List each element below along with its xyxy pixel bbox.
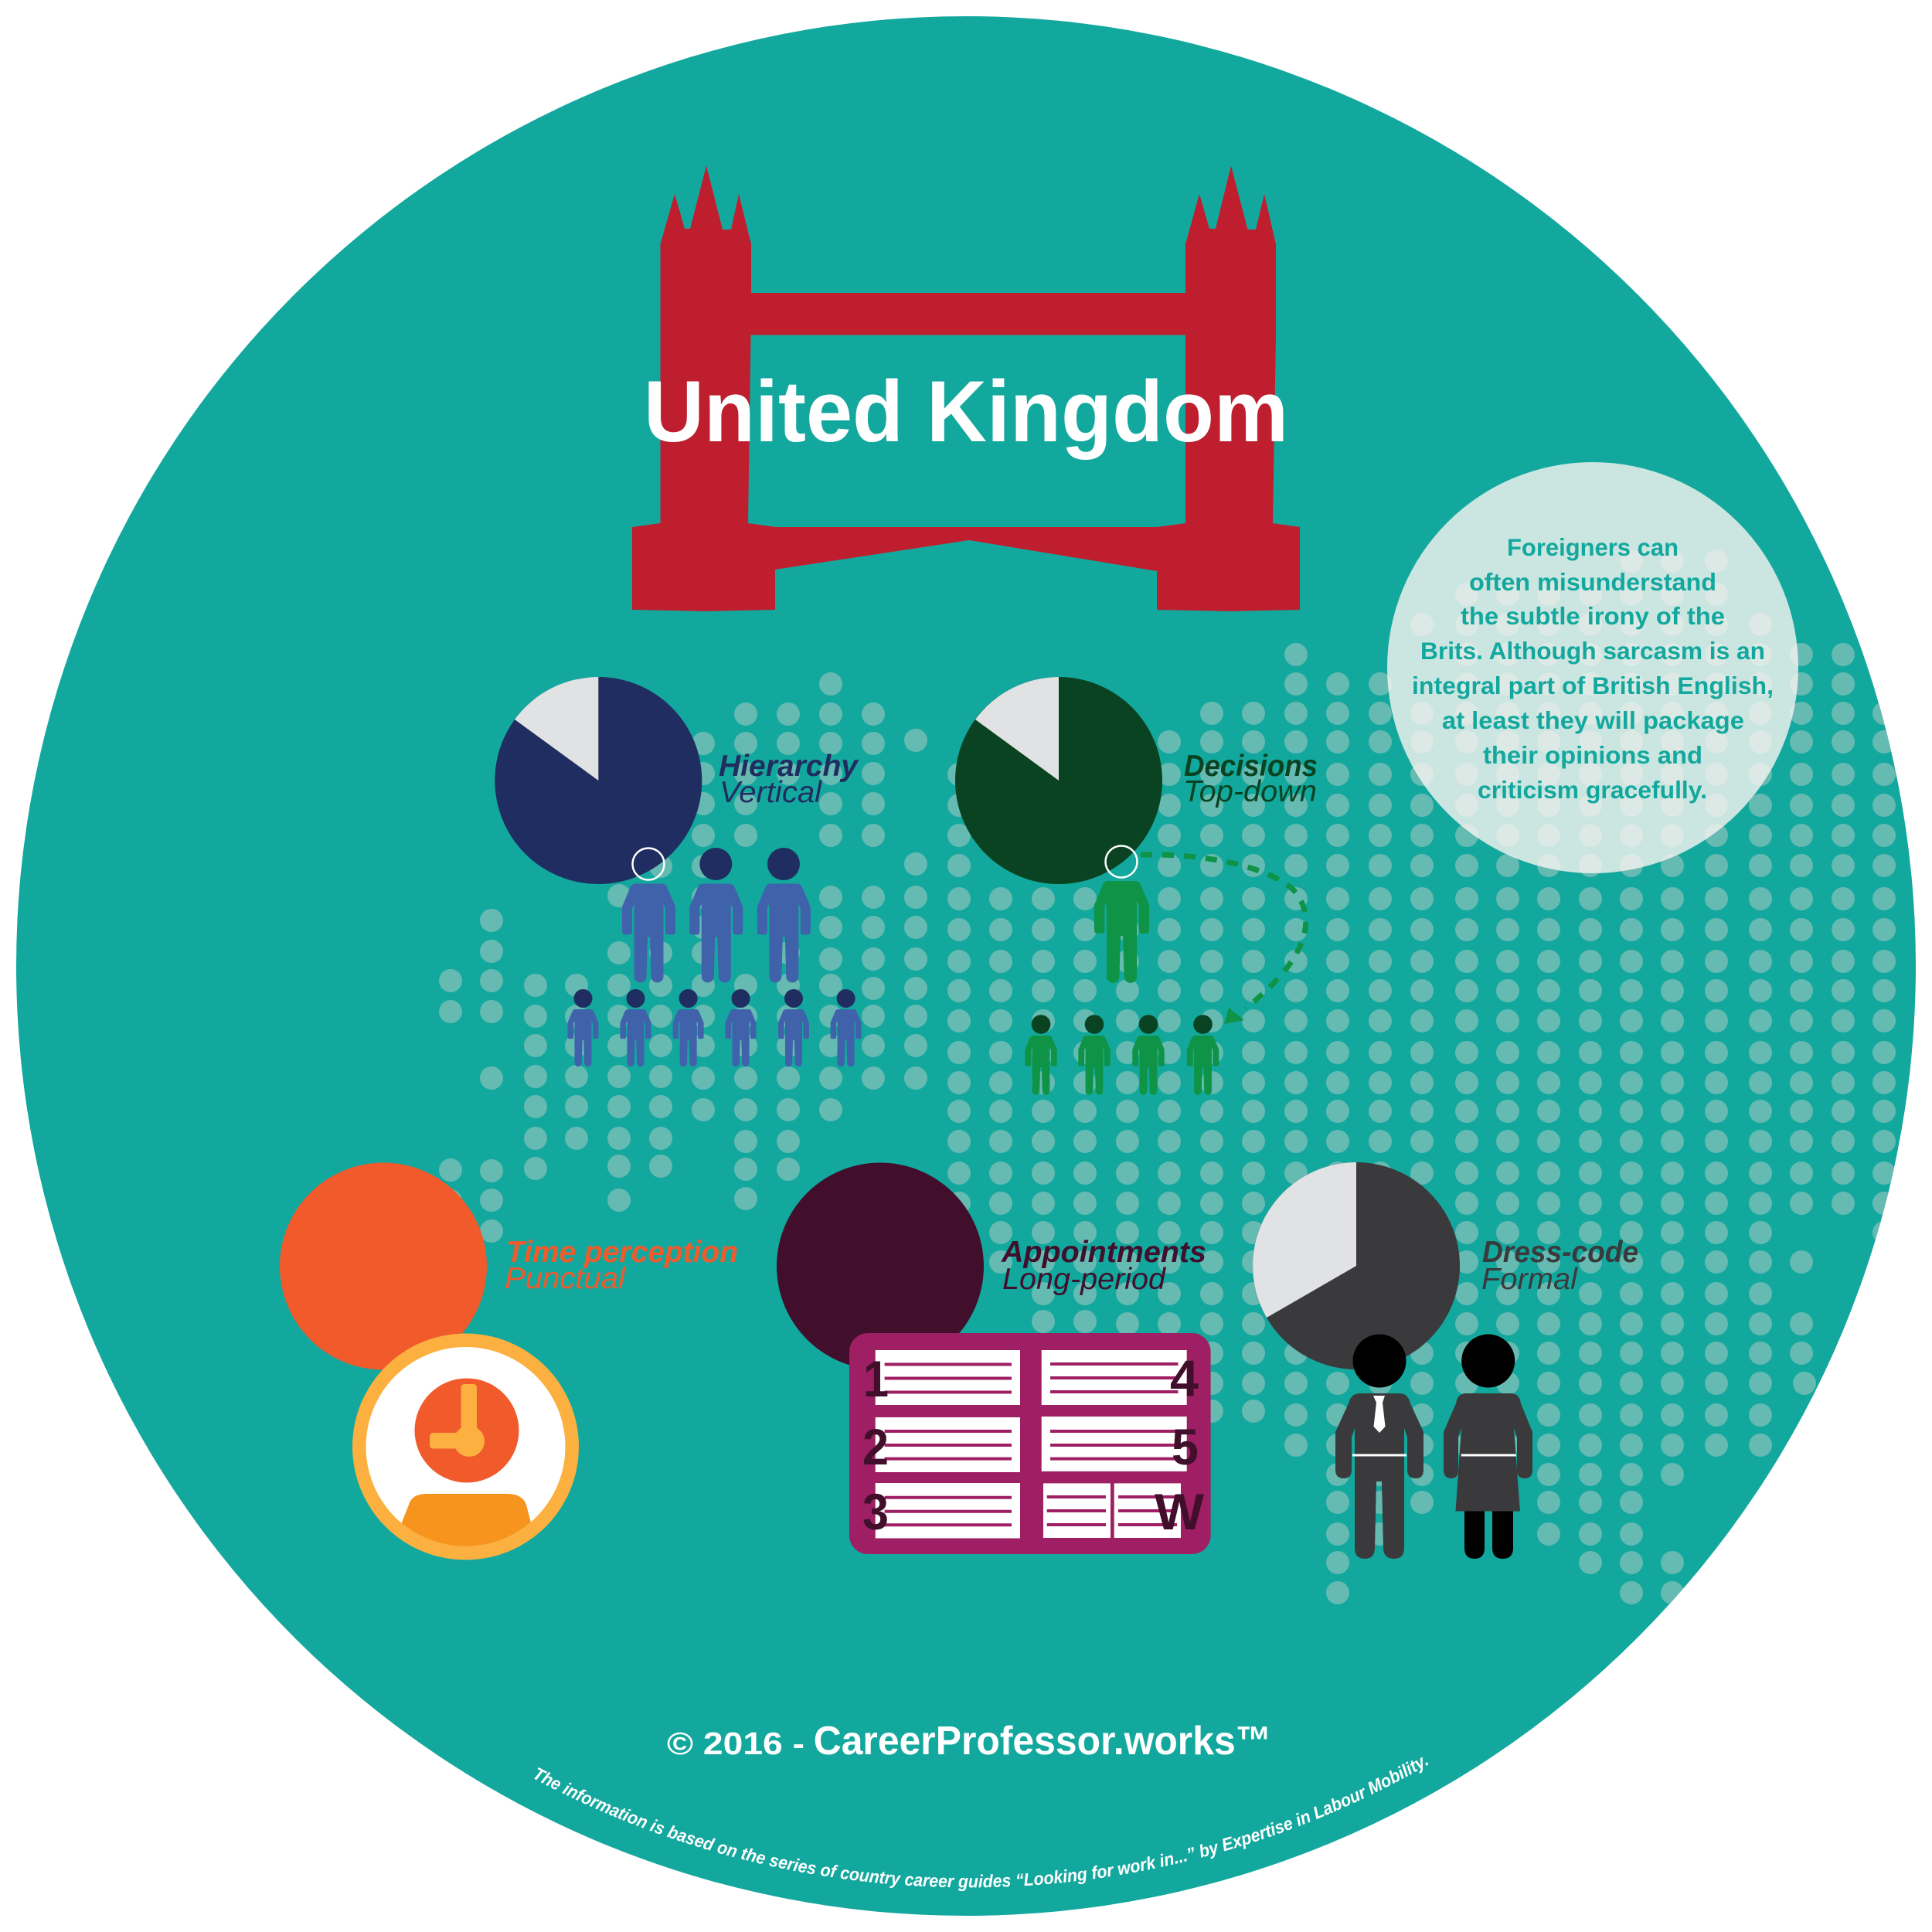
icon: six junior people <box>567 989 862 1066</box>
label: appointments: Long-period <box>1002 1263 1167 1296</box>
icon: three senior people <box>622 848 811 983</box>
callout text: the subtle irony of the <box>1461 602 1725 630</box>
label: appointments: Appointments <box>1001 1236 1206 1269</box>
callout text: their opinions and <box>1483 741 1702 769</box>
callout: irony note <box>1387 462 1798 873</box>
label: dress-code <box>1481 1236 1638 1296</box>
footer: copyright: © 2016 - <box>667 1726 804 1761</box>
arrow: dashed decision path <box>1141 855 1306 1024</box>
label: decisions: Decisions <box>1184 750 1318 783</box>
icon: calendar: 5 <box>1172 1418 1199 1475</box>
label: decisions <box>1183 750 1318 808</box>
pie chart: dress-code <box>1253 1162 1460 1369</box>
panel: appointments <box>777 1162 1211 1554</box>
pie chart: hierarchy <box>495 677 702 884</box>
icon: calendar: 4 <box>1170 1349 1199 1406</box>
label: dress-code: Formal <box>1481 1263 1578 1296</box>
icon: calendar <box>849 1333 1211 1554</box>
callout text: often misunderstand <box>1469 568 1716 596</box>
footer: copyright: CareerProfessor.works <box>814 1719 1236 1764</box>
icon: clock and person <box>352 1334 579 1577</box>
label: time perception: Punctual <box>505 1262 627 1295</box>
icon: leader <box>1094 845 1149 983</box>
pie chart: time perception <box>280 1162 487 1369</box>
callout text: Foreigners can <box>1507 533 1679 561</box>
label: hierarchy <box>719 750 860 809</box>
panel: dress-code <box>1253 1162 1638 1559</box>
callout bubble <box>1387 462 1798 873</box>
label: hierarchy: Hierarchy <box>719 750 860 783</box>
label: appointments <box>1001 1236 1206 1296</box>
icon: calendar: 2 <box>862 1418 889 1475</box>
label: time perception: Time perception <box>506 1236 738 1269</box>
callout text: criticism gracefully. <box>1478 776 1707 804</box>
icon: man in suit <box>1335 1334 1423 1559</box>
dotted world map <box>451 561 1884 1593</box>
panel: decisions <box>955 677 1318 1095</box>
label: time perception <box>505 1236 738 1295</box>
callout text: at least they will package <box>1442 706 1744 734</box>
label: dress-code: Dress-code <box>1482 1236 1638 1269</box>
panel: hierarchy <box>495 677 862 1066</box>
title: United Kingdom <box>644 363 1288 460</box>
callout text: integral part of British English, <box>1412 672 1774 699</box>
icon: four team members <box>1025 1015 1219 1095</box>
pie chart: decisions <box>955 677 1162 884</box>
pie chart: appointments <box>777 1162 984 1369</box>
label: hierarchy: Vertical <box>719 776 822 809</box>
icon: calendar: W <box>1155 1483 1205 1540</box>
footer: curved source note: The information is based on the series of country career guides “Looking for work in...” by Expertise in Labour Mobility. <box>535 1757 1428 1891</box>
callout text <box>1412 533 1774 804</box>
icon: calendar: 1 <box>863 1350 889 1407</box>
callout text: Brits. Although sarcasm is an <box>1420 637 1765 665</box>
panel: time perception <box>280 1162 738 1577</box>
icon: calendar: 3 <box>862 1483 889 1540</box>
label: decisions: Top-down <box>1183 775 1317 808</box>
icon: tower bridge <box>632 165 1300 611</box>
icon: woman in skirt suit <box>1444 1334 1532 1559</box>
footer: copyright: ™ <box>1236 1719 1271 1764</box>
